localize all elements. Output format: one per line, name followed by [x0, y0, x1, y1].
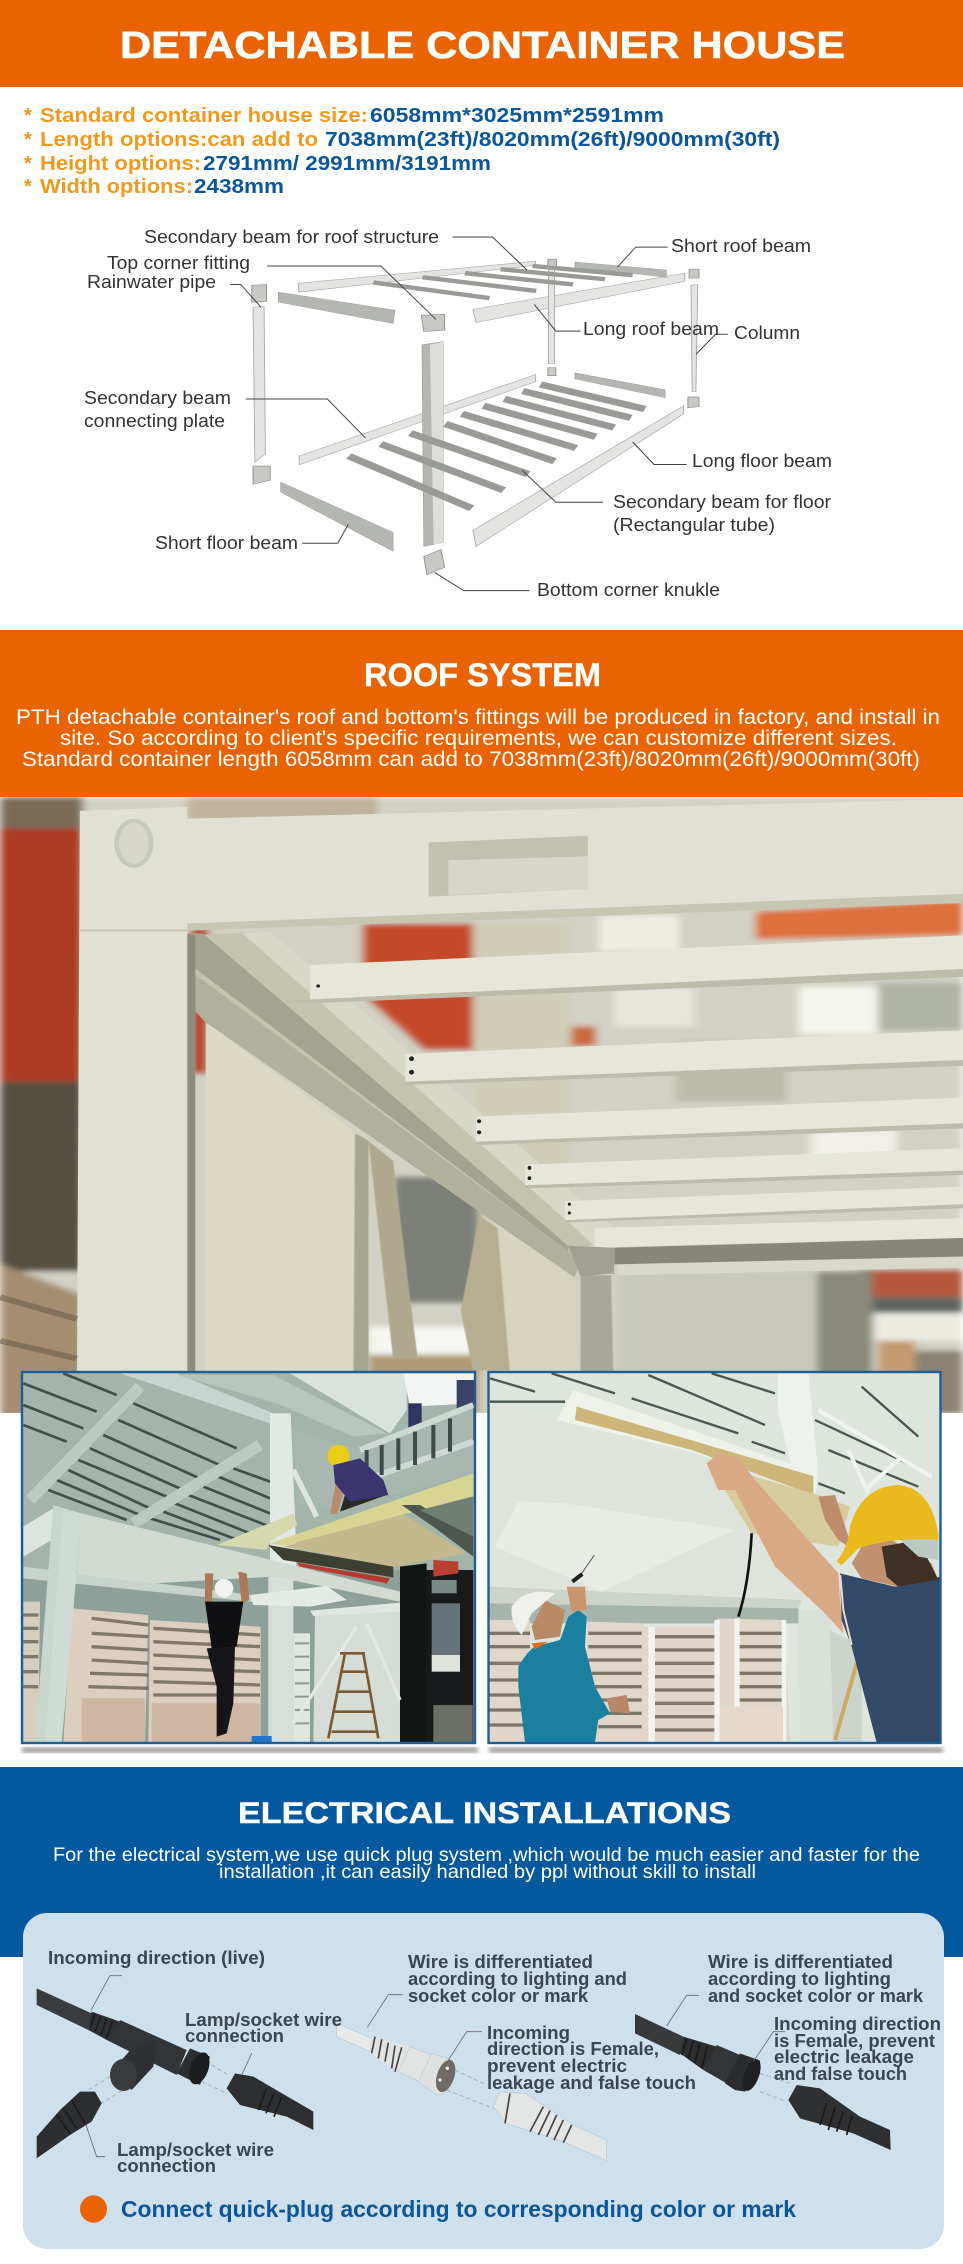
- callout: connect quick-plug: Connect quick-plug according to corresponding color or mark: [121, 2196, 796, 2222]
- text block: size options: *: [24, 129, 32, 151]
- panel: top header: [0, 0, 963, 87]
- exploded beams and columns: [230, 237, 728, 591]
- label: lamp socket wire connection upper: connection: [185, 2026, 284, 2046]
- text block: size options: 2791mm/ 2991mm/3191mm: [203, 153, 491, 175]
- stacked goods: [23, 1602, 400, 1743]
- yellow panel edge: [557, 1390, 818, 1496]
- blue bucket: [252, 1736, 272, 1743]
- text block: size options: 2438mm: [194, 176, 284, 198]
- label: secondary beam for floor: (Rectangular tube): [613, 515, 775, 535]
- text block: size options: *: [24, 153, 32, 175]
- label: wire differentiated middle: socket color or mark: [408, 1986, 589, 2006]
- panel: roof system banner: [0, 630, 963, 797]
- label: incoming direction female right: and false touch: [774, 2064, 907, 2084]
- illustration: white connector: [337, 1995, 607, 2161]
- white column: [778, 1373, 818, 1473]
- cross beams: [276, 935, 963, 1276]
- panel: electrical installations banner: [0, 1767, 963, 1957]
- ceiling light girders: [30, 1387, 260, 1523]
- label: secondary beam connecting plate: connecting plate: [84, 411, 225, 431]
- label: secondary beam for roof structure: Secondary beam for roof structure: [144, 227, 439, 247]
- worker on ladder: [205, 1572, 249, 1737]
- illustration: black T connector: [37, 1976, 313, 2158]
- text block: size options: *: [24, 176, 32, 198]
- label: short roof beam: Short roof beam: [671, 236, 811, 256]
- label: incoming direction live: Incoming direction (live): [48, 1948, 265, 1968]
- photo: workers fitting roof panel from forklift: [20, 1370, 480, 1753]
- label: lamp socket wire connection lower: connection: [117, 2156, 216, 2176]
- label: wire differentiated middle: [408, 1952, 627, 2006]
- text block: size options: Length options:can add to: [40, 129, 318, 151]
- worker on top: [327, 1445, 388, 1514]
- label: column: Column: [734, 323, 800, 343]
- long side beam: [190, 931, 614, 1258]
- icon: orange dot: [80, 2195, 107, 2223]
- text block: electrical description: For the electrical system,we use quick plug system ,which would be much easier and faster for the: [53, 1844, 920, 1866]
- background lower wall: [23, 1570, 403, 1743]
- label: incoming direction female right: Incoming direction: [774, 2014, 941, 2034]
- label: incoming direction female right: [774, 2014, 941, 2084]
- label: incoming direction female middle: [487, 2023, 696, 2093]
- text block: size options: Height options:: [40, 153, 201, 175]
- tan stack at lower left: [0, 1297, 77, 1358]
- label: wire differentiated middle: Wire is differentiated: [408, 1952, 593, 1972]
- label: incoming direction female middle: Incoming: [487, 2023, 570, 2043]
- ceiling stripes: [23, 1373, 270, 1543]
- heading: roof system: ROOF SYSTEM: [364, 657, 601, 693]
- illustration: black connector pair: [635, 1995, 891, 2150]
- text block: roof description: site. So according to client's specific requirements, we can customize different sizes.: [60, 727, 897, 750]
- label: incoming direction female right: is Female, prevent: [774, 2031, 935, 2051]
- text block: roof description: [16, 706, 940, 771]
- label: wire differentiated right: according to lighting: [708, 1969, 891, 1989]
- white column: [270, 1413, 297, 1577]
- photo: workers installing ceiling panel: [485, 1370, 945, 1753]
- label: lamp socket wire connection upper: [185, 2010, 342, 2046]
- label: lamp socket wire connection lower: Lamp/socket wire: [117, 2140, 274, 2160]
- photo: roof frame beams: [0, 797, 963, 1417]
- label: long roof beam: Long roof beam: [583, 319, 719, 339]
- label: short floor beam: Short floor beam: [155, 533, 298, 553]
- text block: size options: Width options:: [40, 176, 193, 198]
- label: long floor beam: Long floor beam: [692, 451, 832, 471]
- label: wire differentiated right: [708, 1952, 924, 2006]
- forklift: [400, 1560, 473, 1743]
- heading: electrical installations: ELECTRICAL INSTALLATIONS: [238, 1797, 731, 1830]
- label: secondary beam connecting plate: [84, 388, 231, 431]
- label: incoming direction female middle: leakage and false touch: [487, 2073, 696, 2093]
- label: secondary beam for floor: [613, 492, 831, 535]
- label: incoming direction female middle: prevent electric: [487, 2056, 627, 2076]
- top beam with window: [187, 799, 963, 931]
- label: rainwater pipe: Rainwater pipe: [87, 272, 216, 292]
- label: wire differentiated right: and socket color or mark: [708, 1986, 924, 2006]
- label: top corner fitting: Top corner fitting: [107, 253, 250, 273]
- label: secondary beam connecting plate: Secondary beam: [84, 388, 231, 408]
- label: wire differentiated middle: according to lighting and: [408, 1969, 627, 1989]
- corner column: [77, 807, 195, 1413]
- panel under side: [488, 1405, 842, 1600]
- label: incoming direction female right: electric leakage: [774, 2047, 914, 2067]
- dark banners: [408, 1403, 422, 1428]
- worker in teal: [511, 1555, 630, 1743]
- band and windows: [488, 1587, 802, 1608]
- text block: size options: [24, 105, 780, 198]
- text block: electrical description: installation ,it can easily handled by ppl without skill to install: [219, 1861, 756, 1883]
- panel: quick-plug connectors: [23, 1913, 944, 2249]
- racks: [488, 1618, 790, 1743]
- text block: size options: 6058mm*3025mm*2591mm: [370, 105, 664, 127]
- text block: size options: *: [24, 105, 32, 127]
- label: bottom corner knuckle: Bottom corner knukle: [537, 580, 720, 600]
- text block: electrical description: [53, 1844, 920, 1883]
- text block: size options: 7038mm(23ft)/8020mm(26ft)/9000mm(30ft): [325, 129, 780, 151]
- blurred factory background: [0, 797, 963, 1417]
- text block: size options: Standard container house size:: [40, 105, 368, 127]
- ceiling stripes: [490, 1373, 918, 1493]
- label: lamp socket wire connection upper: Lamp/socket wire: [185, 2010, 342, 2030]
- worker in navy with hard hat: [707, 1453, 940, 1743]
- label: wire differentiated right: Wire is differentiated: [708, 1952, 893, 1972]
- railing area: [456, 1405, 474, 1440]
- frame column and beams: [23, 1508, 53, 1557]
- chart: exploded frame diagram: [84, 227, 832, 600]
- label: incoming direction female middle: direction is Female,: [487, 2039, 659, 2059]
- label: secondary beam for floor: Secondary beam for floor: [613, 492, 831, 512]
- aluminium and wooden ladders: [293, 1623, 400, 1723]
- label: lamp socket wire connection lower: [117, 2140, 274, 2176]
- container back columns: [205, 1022, 963, 1371]
- rivet holes: [316, 984, 571, 1215]
- text block: roof description: Standard container length 6058mm can add to 7038mm(23ft)/8020mm(26ft)/9000mm(30ft): [22, 748, 920, 771]
- title: DETACHABLE CONTAINER HOUSE: [120, 25, 845, 67]
- text block: roof description: PTH detachable container's roof and bottom's fittings will be produced in factory, and install in: [16, 706, 940, 729]
- insulated panel: [217, 1513, 297, 1550]
